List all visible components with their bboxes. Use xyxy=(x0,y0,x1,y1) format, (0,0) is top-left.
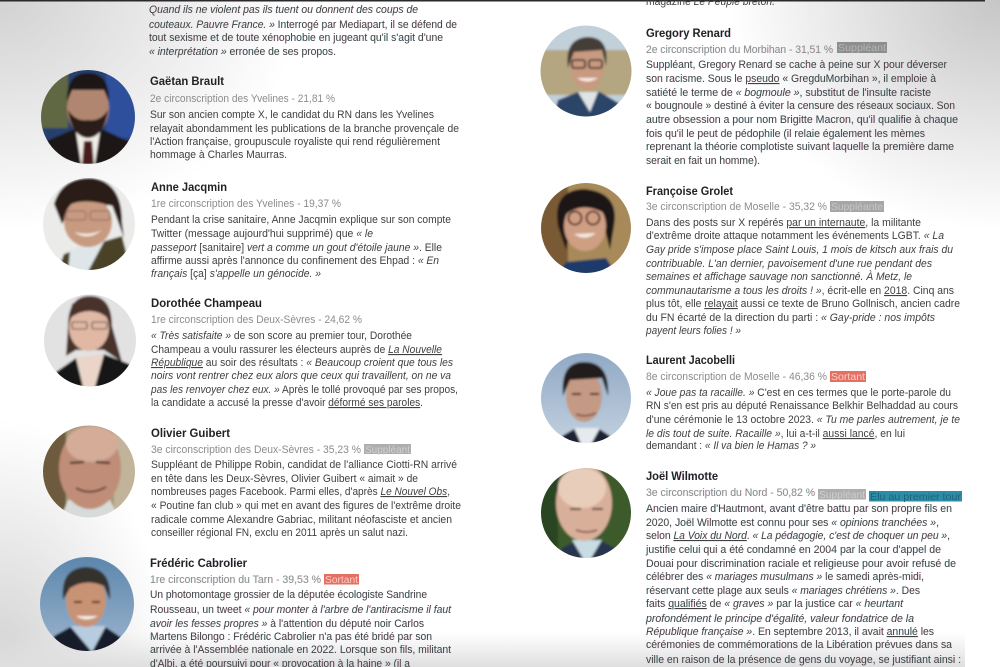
biography: Gregory Renard xyxy=(646,59,958,167)
biography: Françoise Grolet: semaines et affichage sauvage non sanctionné. À Metz, le xyxy=(646,270,912,283)
constituency: Gaëtan Brault: 2e circonscription des Yvelines - 21,81 % xyxy=(150,93,335,105)
biography: Dorothée Champeau: noirs vont rentrer chez eux alors que ceux qui travaillent, on ne va xyxy=(151,370,451,382)
panel: Anne Jacqmin xyxy=(40,175,451,280)
biography: Frédéric Cabrolier: avoir les fesses propres » à l'attention du député noir Carlos xyxy=(150,618,424,630)
biography: Anne Jacqmin: affirme aussi après l'annonce du confinement des Ehpad : « En xyxy=(151,255,439,267)
biography: Frédéric Cabrolier xyxy=(150,589,452,667)
text block: end of previous profile: tout sexisme et de toute xénophobie en jugeant qu'il s'agit d'une xyxy=(149,32,443,44)
biography: Françoise Grolet: Gay pride s'impose place Saint Louis, 1 mois de kitsch aux frais du xyxy=(646,244,953,256)
badge: Sortant: Sortant xyxy=(325,575,358,586)
biography: Gregory Renard: satiété le terme de « bogmoule », substitut de l'insulte raciste xyxy=(646,87,931,99)
biography: Laurent Jacobelli: RN s'en est pris au député Renaissance Belkhir Belhaddad au cours xyxy=(646,400,958,412)
biography: Frédéric Cabrolier: Un photomontage grossier de la députée écologiste Sandrine xyxy=(150,589,427,601)
constituency: Dorothée Champeau: 1re circonscription des Deux-Sèvres - 24,62 % xyxy=(151,314,362,326)
biography: Joël Wilmotte: cérémonies de commémorations de la Libération prévues dans sa xyxy=(646,639,953,651)
biography: Gregory Renard: Suppléant, Gregory Renard se cache à peine sur X pour déverser xyxy=(646,59,947,71)
biography: Gaëtan Brault: relayait abondamment les publications de la branche provençale de xyxy=(150,123,459,135)
portrait: Anne Jacqmin xyxy=(43,178,135,270)
name: Olivier Guibert: Olivier Guibert xyxy=(151,426,230,440)
biography: Anne Jacqmin: Twitter (message aujourd'hui supprimé) que « le xyxy=(151,228,373,240)
biography: Dorothée Champeau: la candidate a accusé la presse d'avoir déformé ses paroles. xyxy=(151,397,423,409)
biography: Françoise Grolet: plus tôt, elle relayait aussi ce texte de Bruno Gollnisch, ancien cadre xyxy=(646,298,960,310)
biography: Olivier Guibert: en tête dans les Deux-Sèvres, Olivier Guibert « aimait » de xyxy=(151,473,418,485)
text block: end of previous profile: couteaux. Pauvre France. » Interrogé par Mediapart, il se défend de xyxy=(149,19,457,31)
biography: Joël Wilmotte: faits qualifiés de « graves » par la justice car « heurtant xyxy=(646,598,904,610)
biography: Gregory Renard: autre obsession a pour nom Brigitte Macron, qu'il qualifie à chaque xyxy=(646,114,958,126)
constituency: Olivier Guibert: 3e circonscription des Deux-Sèvres - 35,23 % xyxy=(151,444,361,456)
biography: Gregory Renard: « bougnoule » destiné à éviter la censure des réseaux sociaux. Son xyxy=(646,100,955,112)
name: Dorothée Champeau: Dorothée Champeau xyxy=(151,296,262,310)
portrait: Olivier Guibert xyxy=(43,426,135,518)
biography: Dorothée Champeau xyxy=(150,330,458,409)
biography: Françoise Grolet xyxy=(645,217,960,337)
biography: Anne Jacqmin: passeport [sanitaire] vert a comme un gout d'étoile jaune ». Elle xyxy=(150,242,442,254)
biography: Joël Wilmotte: République française ». En septembre 2013, il avait annulé les xyxy=(646,626,934,638)
constituency: Anne Jacqmin: 1re circonscription des Yvelines - 19,37 % xyxy=(151,198,341,210)
panel: Laurent Jacobelli xyxy=(538,350,960,452)
biography: Gaëtan Brault: Sur son ancien compte X, le candidat du RN dans les Yvelines xyxy=(150,109,434,121)
biography: Françoise Grolet: Dans des posts sur X repérés par un internaute, la militante xyxy=(646,217,921,229)
biography: Dorothée Champeau: pas les renvoyer chez eux. » Après le tollé provoqué par ses propos, xyxy=(150,384,458,396)
biography: Olivier Guibert xyxy=(151,459,461,539)
name: Laurent Jacobelli: Laurent Jacobelli xyxy=(646,353,735,367)
biography: Dorothée Champeau: Champeau a voulu rassurer les électeurs auprès de La Nouvelle xyxy=(151,344,442,356)
biography: Gaëtan Brault: hommage à Charles Maurras. xyxy=(150,149,287,161)
constituency: Frédéric Cabrolier: 1re circonscription du Tarn - 39,53 % xyxy=(150,574,321,586)
panel: Joël Wilmotte xyxy=(538,465,962,666)
badge: Suppléant: Suppléant xyxy=(365,445,410,456)
text block: end of previous profile: « interprétation » erronée de ses propos. xyxy=(149,46,336,58)
biography: Joël Wilmotte: ville en raison de la présence de gens du voyage, se justifiant ainsi : xyxy=(646,654,961,666)
badge: Suppléant: Suppléant xyxy=(819,490,865,501)
biography: Olivier Guibert: Suppléant de Philippe Robin, candidat de l'alliance Ciotti-RN arrivé xyxy=(151,459,457,471)
name: Anne Jacqmin: Anne Jacqmin xyxy=(151,180,227,194)
constituency: Gregory Renard: 2e circonscription du Morbihan - 31,51 % xyxy=(646,44,833,56)
badge: Sortant: Sortant xyxy=(831,372,865,383)
biography: Joël Wilmotte: réservant cette plage aux seuls « mariages chrétiens ». Des xyxy=(646,585,920,597)
panel: Olivier Guibert xyxy=(40,424,461,539)
biography: Françoise Grolet: communautarisme a tous les droits ! », écrit-elle en 2018. Cinq ans xyxy=(646,285,954,297)
biography: Olivier Guibert: nombreuses pages Facebook. Parmi elles, d'après Le Nouvel Obs, xyxy=(151,486,450,498)
biography: Joël Wilmotte: selon La Voix du Nord. « La pédagogie, c'est de choquer un peu », xyxy=(646,530,950,542)
biography: Dorothée Champeau: « Très satisfaite » de son score au premier tour, Dorothée xyxy=(151,330,412,342)
biography: Françoise Grolet: contribuable. L'an dernier, pavoisement d'une rue pendant des xyxy=(646,258,932,270)
biography: Laurent Jacobelli: demandant : « Il va bien le Hamas ? » xyxy=(646,440,816,452)
biography: Françoise Grolet: payent leurs folies ! » xyxy=(645,325,741,337)
badge: Suppléante: Suppléante xyxy=(831,202,883,213)
biography: Frédéric Cabrolier: Martens Bilongo : Frédéric Cabrolier n'a pas été bridé par son xyxy=(150,631,432,643)
badge: Suppléant: Suppléant xyxy=(838,43,886,54)
portrait: Joël Wilmotte xyxy=(541,468,631,558)
constituency: Laurent Jacobelli: 8e circonscription de Moselle - 46,36 % xyxy=(646,371,827,383)
name: Gregory Renard: Gregory Renard xyxy=(646,26,731,40)
biography: Gregory Renard: serait en fait un homme). xyxy=(646,155,760,167)
biography: Joël Wilmotte: Douai pour discrimination raciale et religieuse pour avoir refusé de xyxy=(646,558,956,570)
biography: Gregory Renard: son racisme. Sous le pseudo « GregduMorbihan », il emploie à xyxy=(646,73,937,85)
biography: Anne Jacqmin: français [ça] s'appelle un génocide. » xyxy=(151,268,321,280)
biography: Françoise Grolet: d'extrême droite attaque notamment les événements LGBT. « La xyxy=(646,230,944,242)
biography: Gregory Renard: fois qu'il le peut de pédophile (il relaie également les mèmes xyxy=(646,128,925,140)
biography: Dorothée Champeau: République au soir des résultats : « Beaucoup croient que tous les xyxy=(151,357,453,369)
text block: end of previous profile xyxy=(149,4,457,58)
biography: Joël Wilmotte: célébrer des « mariages musulmans » le samedi après-midi, xyxy=(646,571,924,583)
portrait: Gregory Renard xyxy=(540,26,632,116)
name: Françoise Grolet: Françoise Grolet xyxy=(646,184,733,198)
biography: Frédéric Cabrolier: arrivée à l'Assemblée nationale en 2022. Lorsque son fils, militant xyxy=(150,644,451,656)
biography: Olivier Guibert: « Poutine fan club » qui met en avant des figures de l'extrême droite xyxy=(151,500,461,512)
badge: Élu au premier tour: Élu au premier tour xyxy=(870,490,962,503)
constituency: Françoise Grolet: 3e circonscription de Moselle - 35,32 % xyxy=(646,201,827,213)
biography: Joël Wilmotte: profondément le principe d'égalité, valeur fondatrice de la xyxy=(645,613,914,625)
biography: Frédéric Cabrolier: Rousseau, un tweet « pour monter à l'arbre de l'antiracisme il faut xyxy=(150,604,452,616)
name: Gaëtan Brault: Gaëtan Brault xyxy=(150,74,224,88)
biography: Olivier Guibert: conseiller régional FN, exclu en 2011 après un salut nazi. xyxy=(151,527,408,539)
biography: Laurent Jacobelli: « Joue pas ta racaille. » C'est en ces termes que le porte-parole du xyxy=(646,387,951,399)
name: Joël Wilmotte: Joël Wilmotte xyxy=(646,469,718,483)
panel: Frédéric Cabrolier xyxy=(38,555,452,667)
panel: Dorothée Champeau xyxy=(42,293,458,409)
biography: Olivier Guibert: radicale comme Alexandre Gabriac, militant néofasciste et ancien xyxy=(151,514,452,526)
portrait: Gaëtan Brault xyxy=(41,70,135,164)
biography: Gaëtan Brault xyxy=(150,109,459,161)
portrait: Laurent Jacobelli xyxy=(541,353,631,443)
portrait: Françoise Grolet xyxy=(541,183,631,273)
panel: Françoise Grolet xyxy=(538,180,960,337)
biography: Joël Wilmotte xyxy=(645,503,961,666)
biography: Laurent Jacobelli: le dis tout de suite. Racaille », lui a-t-il aussi lancé, en lui xyxy=(646,428,905,440)
portrait: Dorothée Champeau xyxy=(44,294,136,386)
name: Frédéric Cabrolier: Frédéric Cabrolier xyxy=(150,556,247,570)
biography: Gaëtan Brault: l'Action française, groupuscule royaliste qui rend régulièrement xyxy=(150,136,440,148)
biography: Françoise Grolet: du FN écarté de la direction du parti : « Gay-pride : nos impôts xyxy=(646,312,935,324)
panel: Gaëtan Brault xyxy=(38,68,459,170)
biography: Joël Wilmotte: 2020, Joël Wilmotte est connu pour ses « opinions tranchées », xyxy=(646,517,939,529)
biography: Gregory Renard: reprenant la théorie complotiste suivant laquelle la première dame xyxy=(646,141,954,153)
panel: Gregory Renard xyxy=(538,23,958,167)
constituency: Joël Wilmotte: 3e circonscription du Nord - 50,82 % xyxy=(646,487,815,499)
biography: Anne Jacqmin xyxy=(150,214,451,280)
portrait: Frédéric Cabrolier xyxy=(40,557,134,651)
text block: end of previous profile: Quand ils ne violent pas ils tuent ou donnent des coups de xyxy=(149,4,418,16)
biography: Joël Wilmotte: justifie celui qui a été condamné en 2004 par la cour d'appel de xyxy=(645,544,941,556)
biography: Laurent Jacobelli xyxy=(646,387,960,452)
biography: Joël Wilmotte: Ancien maire d'Hautmont, avant d'être battu par son propre fils en xyxy=(646,503,952,515)
biography: Laurent Jacobelli: d'une cérémonie le 13 octobre 2023. « Tu me parles autrement, je te xyxy=(646,414,960,426)
biography: Anne Jacqmin: Pendant la crise sanitaire, Anne Jacqmin explique sur son compte xyxy=(151,214,451,226)
